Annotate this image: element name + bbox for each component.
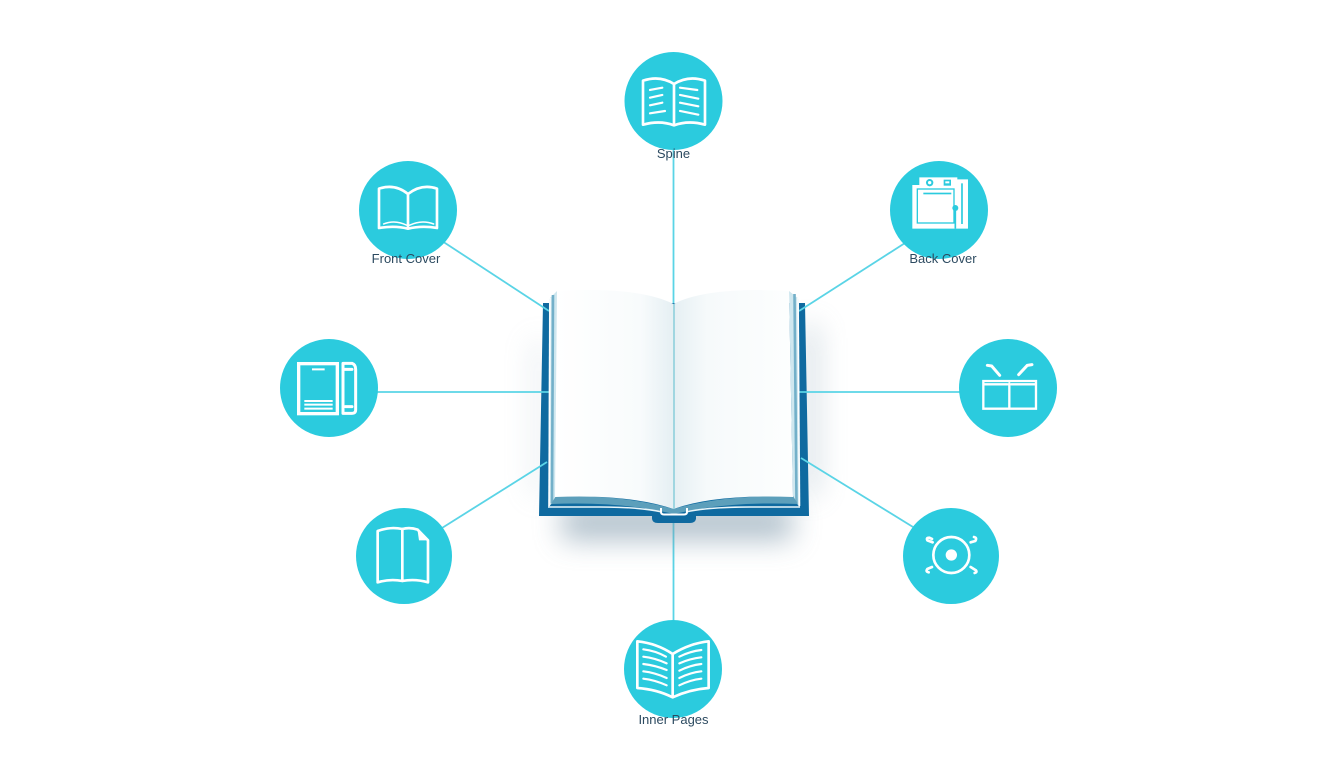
node: front cover <box>359 161 457 266</box>
icon: open book outline <box>379 187 437 229</box>
icon: open book with arrows <box>983 365 1036 409</box>
node: right open box <box>959 339 1057 437</box>
label: inner pages: Inner Pages <box>638 712 709 727</box>
node: left book and spine <box>280 339 378 437</box>
book drop shadow <box>532 325 818 540</box>
page edge bottom band <box>551 496 798 514</box>
node: lower right target <box>903 508 999 604</box>
node: back cover <box>890 161 988 266</box>
icon: back cover panel <box>912 177 968 229</box>
icon: open book with many lines <box>637 641 709 697</box>
connector lines: top and bottom <box>672 150 674 621</box>
connector lines: sides over the cover <box>377 241 960 528</box>
right page <box>674 290 793 509</box>
label: back cover: Back Cover <box>909 251 977 266</box>
page stack left <box>548 291 557 508</box>
icon: disc with corner marks <box>927 537 976 573</box>
label: spine: Spine <box>657 146 690 161</box>
icon: book with folded corner <box>378 528 428 582</box>
centre fold <box>673 304 675 509</box>
node: inner pages <box>624 620 722 727</box>
spine clasp <box>661 508 687 514</box>
central open book <box>377 241 960 540</box>
node: lower left page <box>356 508 452 604</box>
page stack right <box>789 291 800 508</box>
node: spine <box>624 52 722 161</box>
book cover <box>539 303 809 523</box>
icon: open book with lines <box>643 78 705 125</box>
label: front cover: Front Cover <box>372 251 441 266</box>
left page <box>555 290 674 509</box>
icon: cover and spine <box>299 363 356 414</box>
